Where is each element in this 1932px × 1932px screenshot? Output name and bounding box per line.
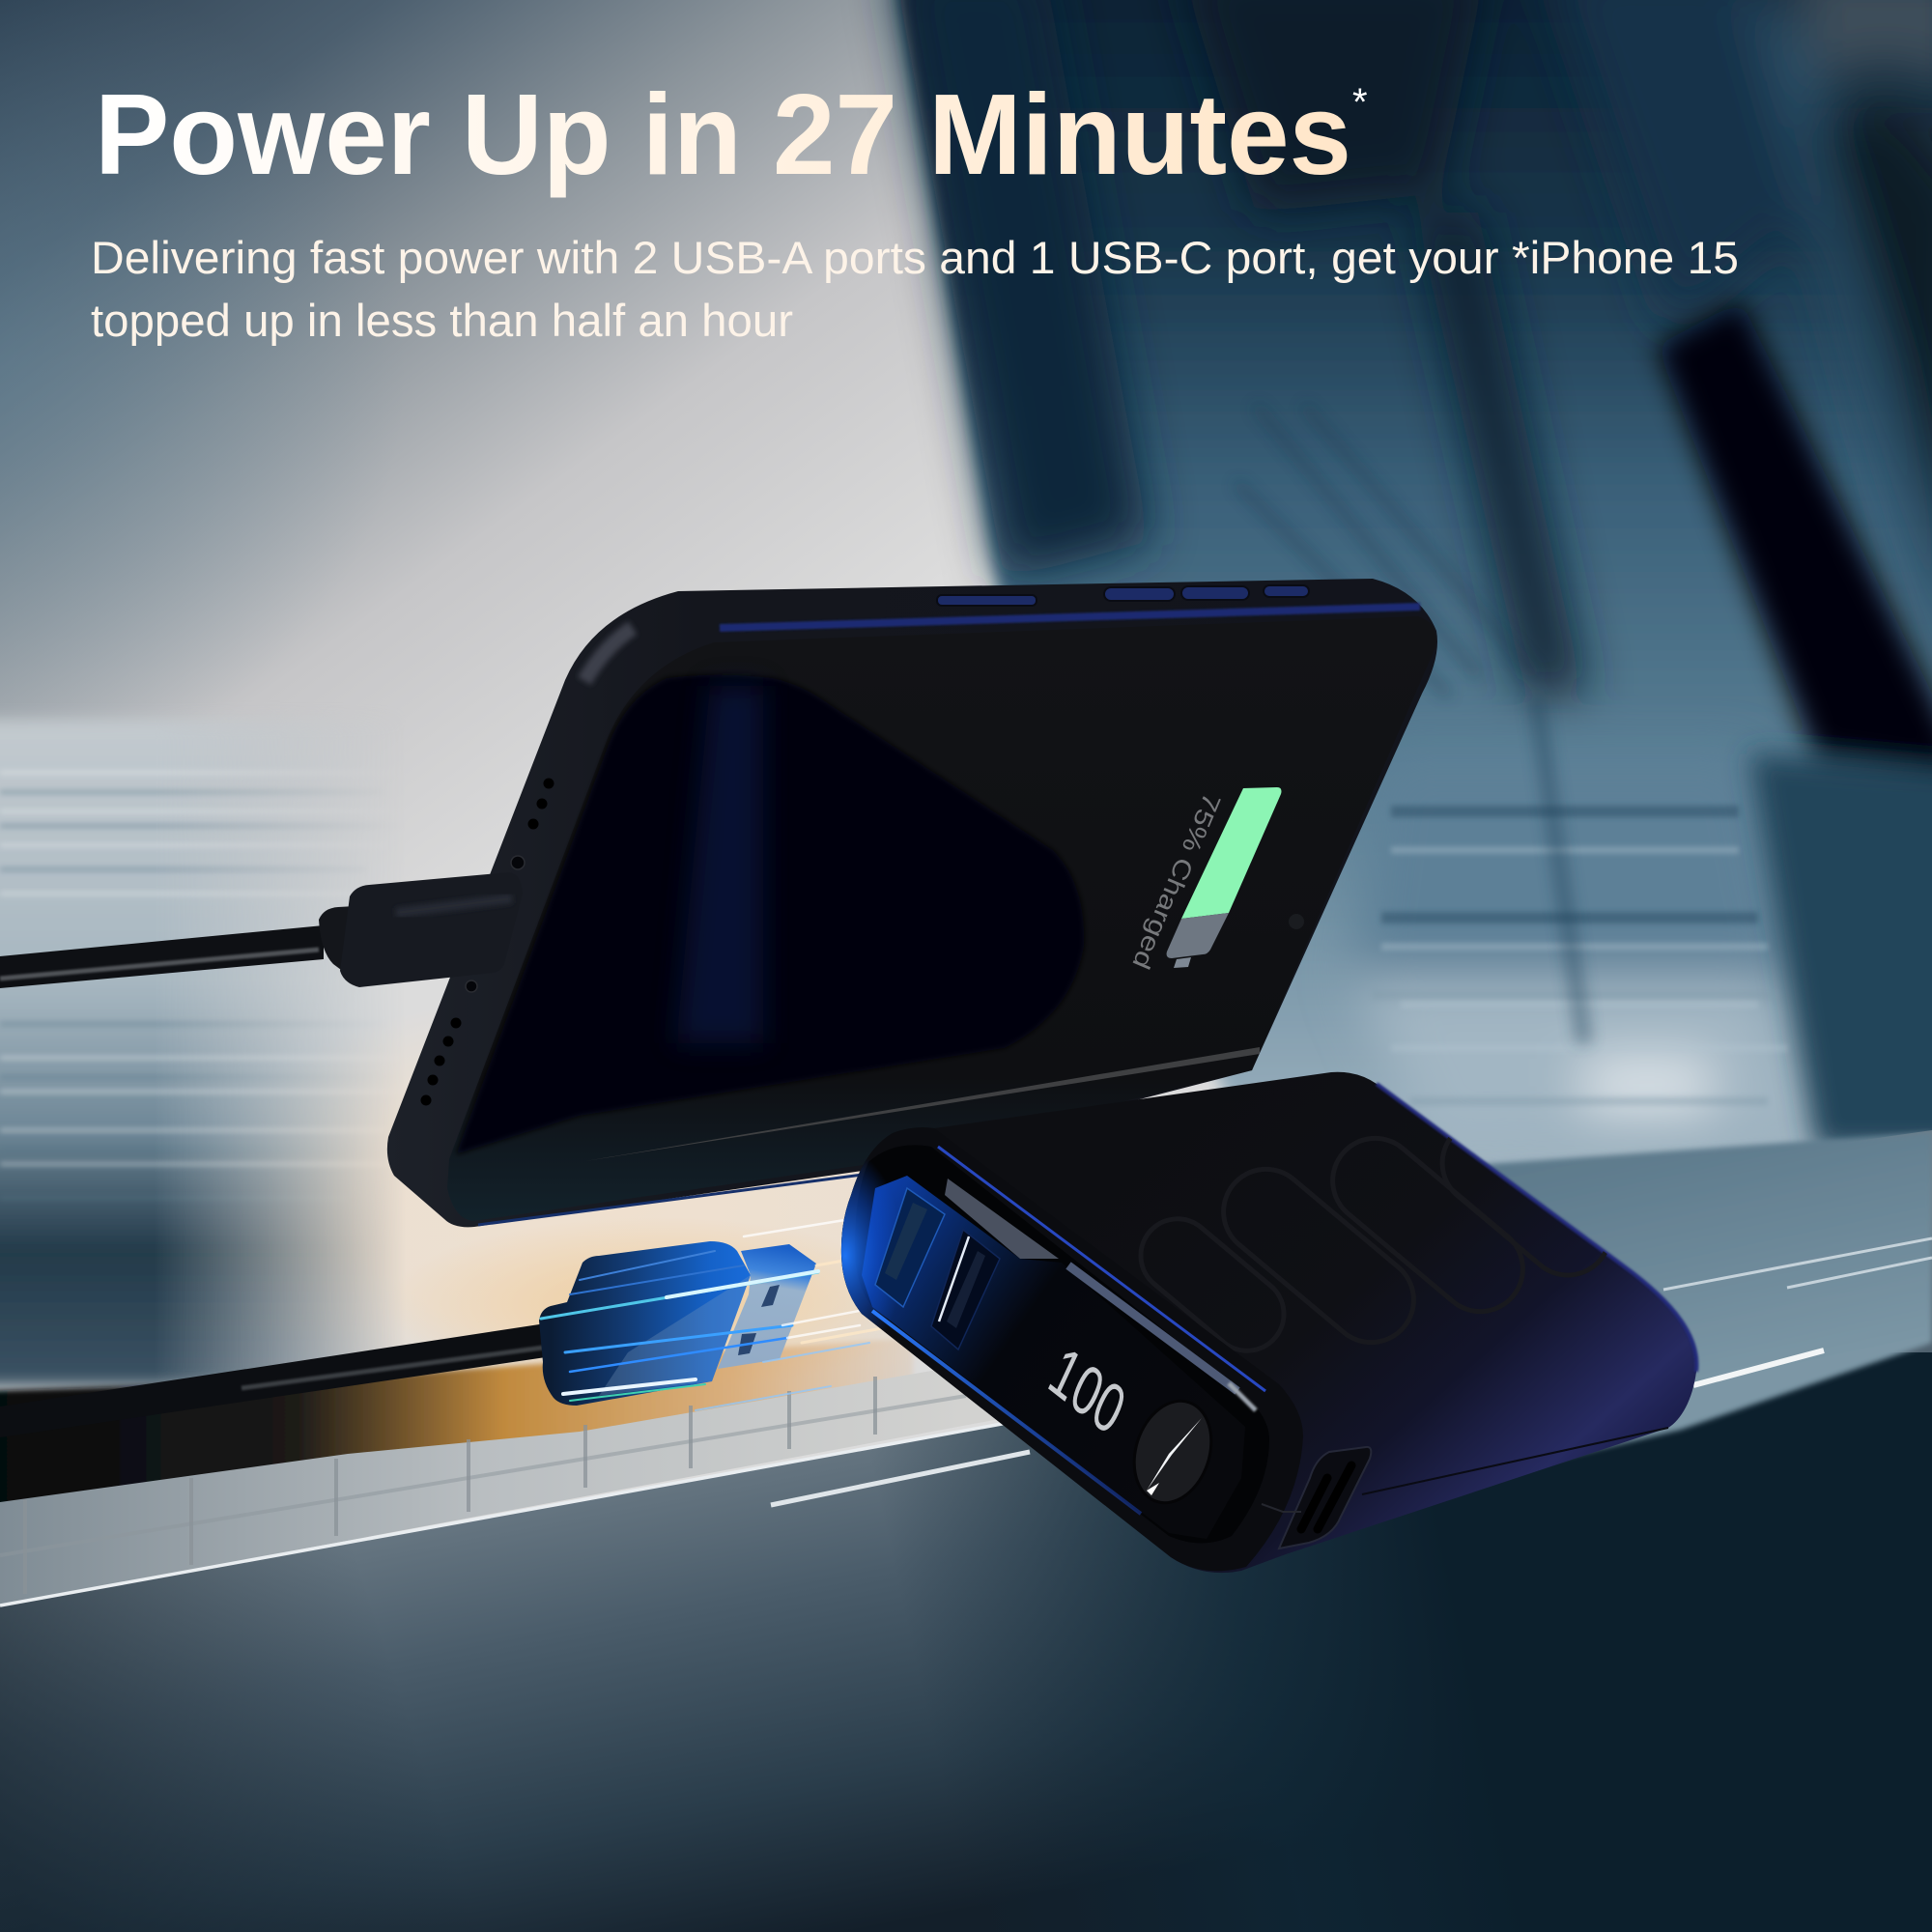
body seam line — [1362, 1428, 1668, 1494]
air streaks between plug and power bank — [696, 1215, 898, 1410]
title footnote asterisk: * — [1352, 81, 1368, 124]
camera dot — [1289, 914, 1304, 929]
left building streaks — [0, 771, 342, 1169]
glossy strip of face — [945, 1179, 1059, 1259]
glossy strip lower — [1068, 1265, 1237, 1391]
bottom edge blue line — [478, 1175, 863, 1225]
power bank — [787, 1072, 1696, 1573]
background: guard rail — [0, 1364, 1005, 1605]
background: streaks on buildings right — [1372, 811, 1787, 1101]
background: road surface — [0, 1130, 1932, 1932]
left blue glow — [840, 1161, 1142, 1515]
subtitle — [91, 232, 1739, 346]
front face gloss inner — [855, 1145, 1269, 1544]
USB-A port 2 — [931, 1230, 1000, 1350]
screen highlight strip — [585, 1047, 1260, 1161]
USB-A speed streaks — [541, 1251, 818, 1401]
subtitle: topped up in less than half an hour — [91, 295, 793, 346]
screen blue reflection — [676, 686, 763, 1043]
speaker holes top — [527, 779, 554, 829]
phone screen — [447, 616, 1436, 1221]
cable cord — [0, 925, 324, 988]
body grip wave pattern — [1138, 1136, 1607, 1352]
top edge blue line — [938, 1147, 1265, 1391]
phone side buttons — [937, 585, 1309, 606]
cable strain relief — [319, 906, 359, 983]
screen dark reflection — [456, 674, 1084, 1154]
battery fill 75 percent — [1181, 787, 1281, 919]
face seam — [1262, 1504, 1301, 1512]
cord — [0, 1323, 546, 1437]
cable plug body — [340, 872, 523, 987]
subtitle: Delivering fast power with 2 USB-A ports and 1 USB-C port, get your *iPhone 15 — [91, 232, 1739, 283]
phone top edge blue sheen — [720, 607, 1420, 628]
USB-A cable — [0, 1241, 818, 1437]
cord sheen — [242, 1347, 551, 1388]
USB-A plug overmould — [539, 1241, 751, 1406]
corner gloss — [1229, 1383, 1256, 1410]
battery nub — [1174, 957, 1191, 968]
phone corner highlight — [584, 628, 633, 681]
phone body frame — [387, 579, 1437, 1227]
background: warm haze behind road — [174, 985, 1063, 1430]
USB-C side panel — [1279, 1447, 1371, 1548]
right edge blue sheen — [1377, 1084, 1696, 1372]
LED digits: 100 — [1039, 1331, 1136, 1449]
title: Power Up in 27 Minutes — [95, 71, 1351, 199]
background: blurred city buildings right — [894, 0, 1932, 1198]
battery empty part — [1167, 913, 1229, 958]
USB-A pale plate — [599, 1275, 751, 1396]
front plate with blue glow — [862, 1176, 1245, 1539]
background: hedge band with orange glow — [0, 1338, 913, 1512]
USB-A metal tip — [718, 1244, 816, 1369]
power bank body — [841, 1072, 1696, 1573]
USB-A port 1 — [875, 1188, 945, 1307]
USB-C cable — [0, 872, 523, 988]
power button — [1122, 1391, 1224, 1513]
phone — [387, 579, 1437, 1227]
USB-A slots — [738, 1285, 780, 1355]
background: blurred left building — [0, 720, 425, 1386]
cable lower sheen — [0, 950, 319, 979]
screws — [466, 856, 525, 992]
plug sheen — [396, 898, 512, 913]
background: sunset glow — [386, 1217, 927, 1391]
text: 75% charged: 75% Charged — [1126, 789, 1227, 974]
speaker holes bottom — [421, 1018, 462, 1105]
front face outer bezel — [841, 1127, 1303, 1571]
